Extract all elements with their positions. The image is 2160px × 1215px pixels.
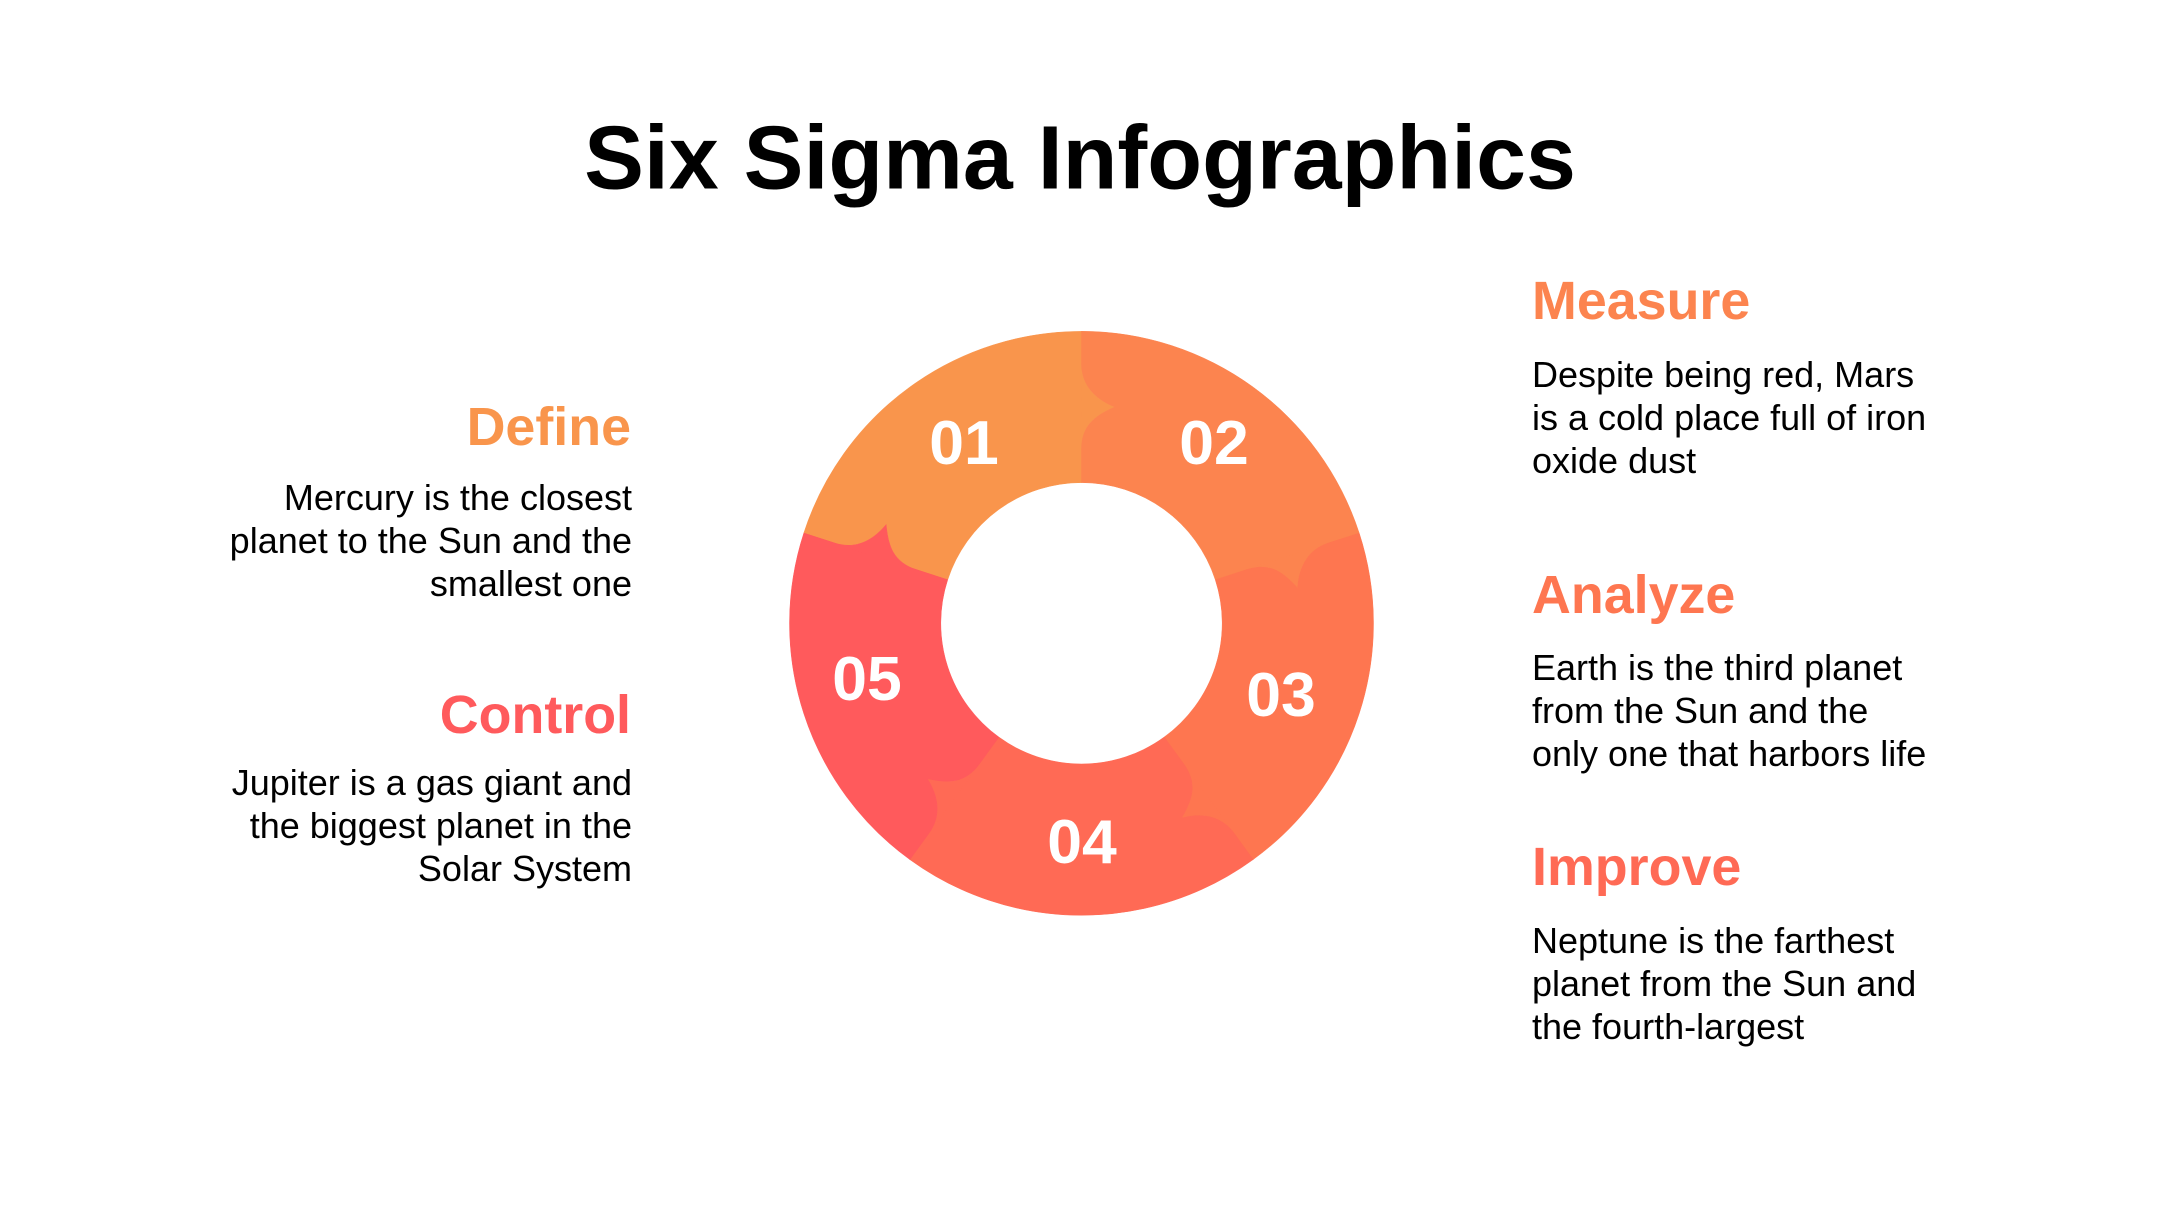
text block: Control: the biggest planet in the <box>250 805 632 846</box>
text block: Analyze <box>1532 565 1926 774</box>
text block: Control: Solar System <box>418 848 632 889</box>
segment 01: 01 <box>929 408 999 478</box>
text block: Define: planet to the Sun and the <box>230 520 632 561</box>
segment 02 <box>1082 331 1370 612</box>
text block: Define: Mercury is the closest <box>284 477 632 518</box>
text block: Improve: the fourth-largest <box>1532 1006 1804 1047</box>
text block: Measure: is a cold place full of iron <box>1532 397 1926 438</box>
text block: Control: Jupiter is a gas giant and <box>232 762 632 803</box>
text block: Analyze: only one that harbors life <box>1532 733 1926 774</box>
text block: Improve: Neptune is the farthest <box>1532 920 1894 961</box>
text block: Improve: planet from the Sun and <box>1532 963 1916 1004</box>
segment 05 <box>677 463 1075 860</box>
text block: Measure: Measure <box>1532 271 1750 331</box>
text block: Improve <box>1532 837 1916 1047</box>
segment 03: 03 <box>1246 660 1316 730</box>
text block: Control <box>232 685 632 889</box>
text block: Define: smallest one <box>430 563 632 604</box>
segment 03 <box>1093 533 1448 894</box>
text block: Improve: Improve <box>1532 837 1741 897</box>
donut chart <box>677 259 1448 1029</box>
text block: Control: Control <box>440 685 631 745</box>
segment 01 <box>804 259 1159 620</box>
text block: Analyze: Analyze <box>1532 565 1735 625</box>
text block: Define <box>230 397 632 604</box>
title: Six Sigma Infographics <box>584 108 1576 208</box>
text block: Measure: oxide dust <box>1532 440 1696 481</box>
text block: Analyze: Earth is the third planet <box>1532 647 1902 688</box>
segment 02: 02 <box>1179 408 1249 478</box>
segment 05: 05 <box>832 644 902 714</box>
text block: Measure: Despite being red, Mars <box>1532 354 1914 395</box>
segment 04: 04 <box>1047 807 1117 877</box>
text block: Analyze: from the Sun and the <box>1532 690 1868 731</box>
segment 04 <box>855 633 1253 1029</box>
text block: Measure <box>1532 271 1926 481</box>
text block: Define: Define <box>467 397 631 457</box>
